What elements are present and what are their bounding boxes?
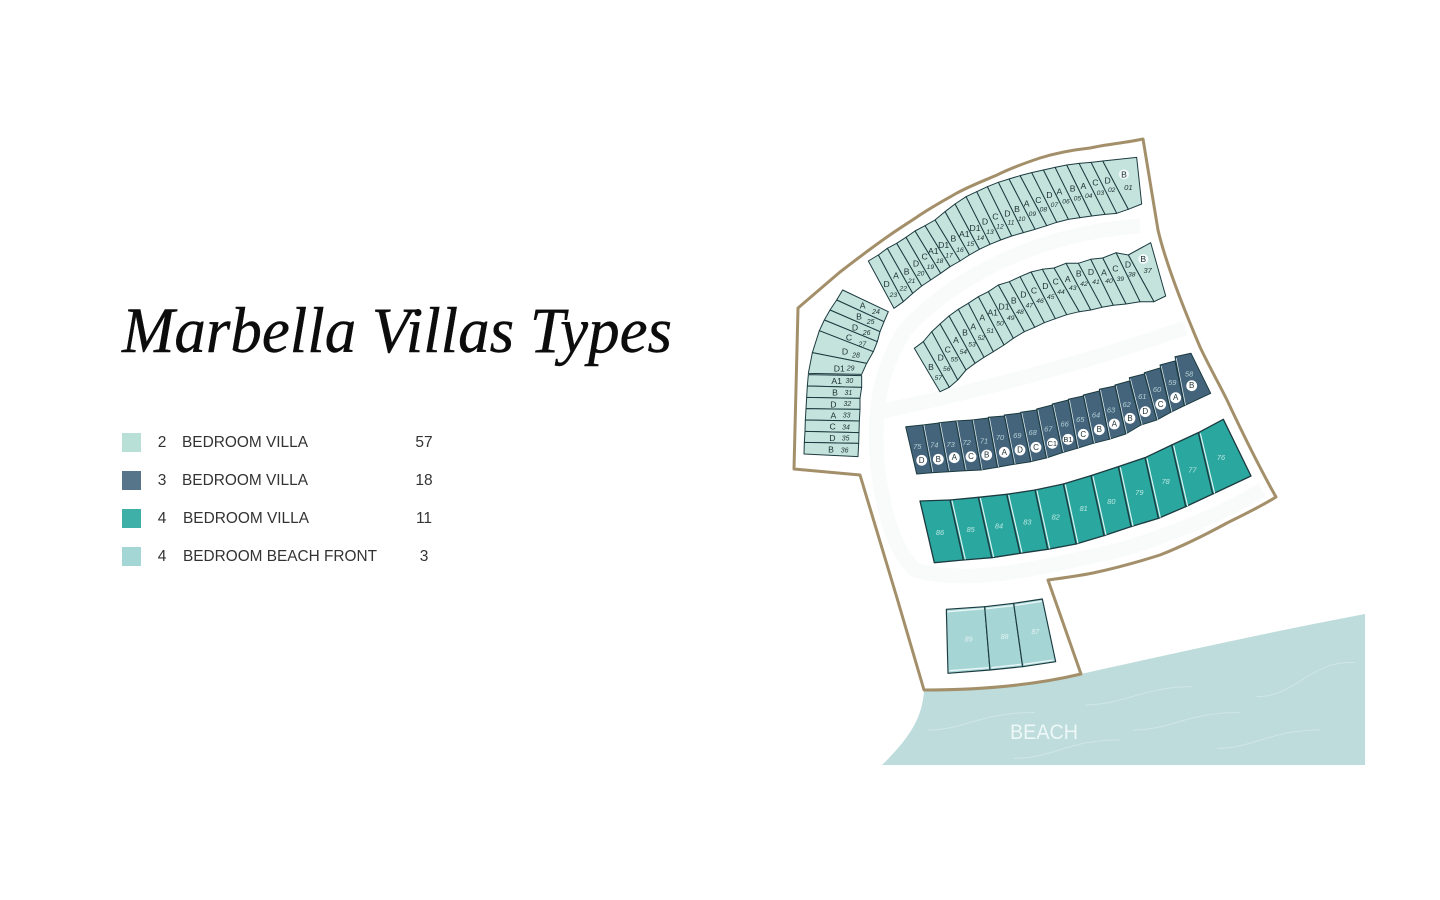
labels: villas 37-57: 37 — [1144, 266, 1153, 275]
labels: villas 24-36: A1 — [831, 376, 842, 386]
labels: villas 58-75: 66 — [1061, 420, 1070, 428]
labels: villas 37-57: 47 — [1026, 302, 1033, 310]
labels: villas 58-75: B — [1127, 414, 1133, 423]
labels: villas 37-57: 55 — [951, 356, 958, 364]
labels: villas 01-23: 15 — [967, 241, 974, 248]
labels: villas 37-57: A — [953, 335, 959, 345]
labels: villas 24-36: C — [830, 422, 836, 432]
labels: villas 58-75: B — [984, 450, 989, 460]
labels: villas 01-23: 09 — [1029, 211, 1036, 218]
labels: villas 01-23: A1 — [959, 229, 970, 239]
labels: villas 01-23: D — [913, 258, 919, 268]
labels: villas 37-57: 45 — [1047, 294, 1055, 301]
labels: villas 24-36: 28 — [851, 352, 860, 359]
labels: villas 76-86: 81 — [1080, 504, 1088, 513]
band: villas 87-89 beach front — [946, 599, 1056, 673]
labels: villas 58-75: B — [936, 455, 941, 464]
labels: villas 01-23: 19 — [927, 264, 934, 271]
site boundary — [794, 139, 1276, 690]
labels: villas 37-57: D1 — [998, 302, 1010, 312]
labels: villas 24-36: 25 — [866, 319, 875, 326]
labels: villas 24-36: A — [830, 410, 836, 420]
labels: villas 58-75: 63 — [1107, 406, 1116, 414]
labels: villas 24-36: A — [860, 301, 866, 311]
labels: villas 37-57: 43 — [1069, 285, 1077, 292]
legend row: 4 bedroom beach front — [122, 547, 428, 566]
labels: villas 24-36: 34 — [842, 424, 850, 431]
labels: villas 58-75: 58 — [1185, 370, 1194, 378]
labels: villas 24-36: 36 — [841, 447, 849, 454]
labels: villas 58-75: 69 — [1013, 431, 1022, 440]
labels: villas 37-57: 41 — [1092, 279, 1100, 286]
beach waves — [928, 663, 1355, 758]
labels: villas 24-36: 31 — [844, 390, 852, 397]
band: villas 58-75 — [906, 353, 1211, 474]
labels: villas 58-75: A — [1112, 420, 1118, 428]
labels: villas 01-23: B — [950, 233, 956, 243]
labels: villas 01-23: D — [982, 217, 988, 227]
labels: villas 76-86 — [936, 453, 1226, 537]
title: Marbella Villas Types — [121, 295, 672, 367]
legend row: 4 bedroom villa — [122, 509, 432, 528]
labels: villas 01-23: 03 — [1097, 190, 1104, 197]
labels: villas 01-23: A — [893, 271, 899, 281]
labels: villas 58-75: 62 — [1123, 400, 1132, 409]
labels: villas 58-75: C1 — [1048, 439, 1057, 448]
labels: villas 01-23: C — [922, 252, 928, 262]
labels: villas 58-75: 73 — [947, 440, 956, 449]
labels: villas 37-57: 53 — [968, 342, 976, 348]
legend row: 3 bedroom villa — [122, 471, 433, 490]
labels: villas 37-57: D — [1020, 290, 1026, 300]
labels: villas 37-57: 56 — [943, 366, 951, 373]
legend row: 3 bedroom villa: 18 — [415, 472, 433, 489]
beach label: BEACH — [1010, 721, 1078, 744]
labels: villas 37-57: 39 — [1117, 276, 1124, 283]
legend row: 2 bedroom villa — [122, 433, 433, 452]
labels: villas 01-23: 06 — [1062, 198, 1070, 205]
labels: villas 37-57: D — [1125, 260, 1131, 270]
labels: villas 58-75: A — [1002, 448, 1008, 457]
labels: villas 01-23: D — [884, 279, 890, 289]
labels: villas 37-57: 52 — [978, 335, 985, 342]
labels: villas 01-23: 11 — [1008, 219, 1015, 226]
labels: villas 76-86: 80 — [1107, 497, 1116, 506]
legend row: 4 bedroom beach front: BEDROOM BEACH FRONT — [183, 548, 378, 565]
labels: villas 37-57: A — [1065, 274, 1071, 284]
legend row: 2 bedroom villa: BEDROOM VILLA — [182, 434, 309, 451]
labels: villas 01-23: 10 — [1018, 216, 1026, 223]
labels: villas 76-86: 79 — [1135, 488, 1143, 497]
labels: villas 24-36: 24 — [871, 309, 880, 316]
labels: villas 24-36: D — [842, 347, 848, 357]
labels: villas 01-23: D1 — [969, 223, 981, 233]
labels: villas 58-75: D — [919, 456, 925, 465]
beach — [882, 614, 1365, 765]
labels: villas 37-57: 48 — [1016, 309, 1024, 316]
labels: villas 01-23: 13 — [986, 229, 994, 236]
labels: villas 01-23: 04 — [1085, 193, 1093, 200]
labels: villas 37-57: 54 — [960, 349, 967, 356]
labels: villas 37-57: B — [1076, 269, 1082, 279]
legend row: 4 bedroom villa: 11 — [416, 510, 432, 527]
labels: villas 01-23: 18 — [936, 258, 944, 265]
labels: villas 58-75: C — [1033, 443, 1039, 452]
labels: villas 01-23: 16 — [956, 247, 964, 254]
labels: villas 01-23: 17 — [945, 252, 953, 259]
labels: villas 01-23: D1 — [938, 240, 949, 250]
labels: villas 37-57: 57 — [935, 375, 942, 382]
labels: villas 01-23: 05 — [1074, 195, 1081, 202]
labels: villas 37-57: C — [1053, 277, 1059, 287]
labels: villas 37-57: A — [970, 322, 976, 332]
labels: villas 01-23: A — [1024, 198, 1030, 208]
band: villas 76-86 — [920, 419, 1251, 563]
labels: villas 58-75 — [913, 370, 1197, 466]
labels: villas 76-86: 86 — [936, 528, 945, 537]
labels: villas 01-23: A1 — [928, 246, 939, 256]
labels: villas 58-75: 70 — [996, 433, 1005, 442]
unit separators: villas 58-75 — [924, 358, 1186, 472]
inner white edge: villas 87-89 — [948, 601, 1053, 671]
labels: villas 24-36: 32 — [843, 401, 851, 408]
labels: villas 87-89: 89 — [965, 636, 973, 643]
labels: villas 24-36: D1 — [834, 363, 845, 373]
labels: villas 37-57: A — [1101, 267, 1107, 277]
labels: villas 87-89 — [965, 629, 1040, 643]
legend row: 4 bedroom beach front: 4 — [158, 548, 167, 565]
labels: villas 01-23: B — [1070, 184, 1076, 194]
legend row: 2 bedroom villa: 57 — [415, 434, 433, 451]
labels: villas 01-23: 12 — [996, 223, 1004, 230]
labels: villas 76-86: 78 — [1162, 477, 1171, 486]
unit separators: villas 76-86 — [952, 433, 1215, 559]
labels: villas 58-75: C — [1080, 430, 1086, 439]
labels: villas 01-23: 23 — [889, 292, 897, 299]
labels: villas 01-23: 07 — [1051, 202, 1058, 209]
labels: villas 01-23: C — [992, 212, 998, 222]
labels: villas 01-23: 01 — [1124, 183, 1133, 192]
labels: villas 58-75: B — [1097, 425, 1102, 434]
labels: villas 76-86: 84 — [995, 521, 1003, 530]
labels: villas 87-89: 88 — [1001, 634, 1009, 641]
band: villas 37-57 — [914, 243, 1166, 392]
labels: villas 01-23: B — [1014, 204, 1020, 214]
labels: villas 37-57: D — [1042, 281, 1048, 291]
labels: villas 58-75: 71 — [980, 436, 988, 446]
labels: villas 01-23: D — [1004, 208, 1010, 218]
labels: villas 37-57: C — [1112, 264, 1118, 274]
labels: villas 24-36: 30 — [845, 378, 853, 385]
labels: villas 58-75: C — [1158, 400, 1164, 409]
labels: villas 01-23: D — [1105, 176, 1111, 186]
labels: villas 37-57: B — [1011, 295, 1017, 305]
labels: villas 37-57: C — [1031, 285, 1037, 295]
labels: villas 24-36: D — [852, 323, 858, 333]
labels: villas 01-23: 02 — [1108, 187, 1116, 194]
labels: villas 76-86: 83 — [1023, 517, 1032, 526]
labels: villas 76-86: 77 — [1188, 465, 1197, 474]
labels: villas 37-57: D — [938, 353, 944, 363]
labels: villas 01-23: A — [1080, 181, 1086, 191]
legend row: 3 bedroom villa: 3 — [158, 472, 166, 489]
labels: villas 58-75: B1 — [1063, 435, 1073, 444]
labels: villas 01-23: 08 — [1040, 206, 1047, 213]
labels: villas 37-57: A1 — [987, 307, 998, 317]
labels: villas 01-23 — [884, 169, 1133, 299]
band: villas 01-23 — [868, 157, 1142, 308]
labels: villas 76-86: 82 — [1052, 512, 1060, 521]
labels: villas 24-36: 26 — [862, 330, 871, 337]
legend row: 2 bedroom villa: 2 — [158, 434, 166, 451]
site roads — [876, 226, 1262, 576]
labels: villas 58-75: A — [1173, 393, 1179, 402]
labels: villas 37-57: B — [962, 328, 968, 338]
labels: villas 58-75: 75 — [913, 442, 922, 451]
labels: villas 24-36: B — [828, 444, 834, 454]
labels: villas 24-36: B — [856, 312, 862, 322]
labels: villas 58-75: 68 — [1029, 428, 1038, 437]
labels: villas 37-57: 49 — [1007, 315, 1015, 322]
labels: villas 37-57: B — [1140, 254, 1146, 264]
labels: villas 58-75: 72 — [963, 438, 972, 447]
labels: villas 24-36: 33 — [843, 412, 851, 419]
labels: villas 37-57: 40 — [1105, 278, 1113, 285]
labels: villas 76-86: 85 — [967, 525, 976, 534]
legend row: 3 bedroom villa: BEDROOM VILLA — [182, 472, 309, 489]
labels: villas 58-75: 74 — [930, 440, 938, 450]
band: villas 24-36 — [804, 290, 888, 457]
labels: villas 01-23: 22 — [899, 285, 907, 292]
labels: villas 24-36: B — [832, 388, 838, 398]
labels: villas 24-36: C — [846, 332, 852, 342]
labels: villas 24-36: 29 — [846, 365, 855, 372]
labels: villas 58-75: B — [1189, 381, 1194, 390]
labels: villas 37-57: 44 — [1057, 289, 1065, 296]
labels: villas 24-36: D — [829, 433, 835, 443]
labels: villas 24-36: D — [830, 399, 836, 409]
labels: villas 58-75: 59 — [1168, 378, 1177, 387]
labels: villas 37-57: 50 — [996, 320, 1004, 328]
labels: villas 58-75: 65 — [1076, 415, 1085, 424]
labels: villas 37-57: 38 — [1128, 272, 1136, 278]
labels: villas 58-75: 64 — [1092, 410, 1100, 420]
labels: villas 58-75: D — [1017, 446, 1023, 454]
labels: villas 76-86: 76 — [1217, 453, 1226, 462]
labels: villas 37-57: B — [928, 362, 934, 372]
labels: villas 58-75: D — [1142, 407, 1148, 416]
labels: villas 37-57: A — [979, 312, 985, 322]
labels: villas 01-23: 20 — [916, 270, 925, 277]
labels: villas 37-57: 46 — [1036, 298, 1044, 305]
labels: villas 01-23: 21 — [907, 278, 916, 285]
labels: villas 37-57: 51 — [987, 328, 994, 335]
legend — [122, 433, 433, 566]
labels: villas 01-23: D — [1046, 190, 1052, 200]
labels: villas 37-57: D — [1088, 267, 1094, 277]
labels: villas 01-23: C — [1035, 195, 1041, 205]
labels: villas 37-57: C — [945, 344, 951, 354]
legend row: 4 bedroom villa: BEDROOM VILLA — [183, 510, 310, 527]
labels: villas 01-23: B — [1121, 169, 1127, 179]
labels: villas 24-36 — [828, 301, 880, 454]
labels: villas 87-89: 87 — [1031, 629, 1040, 636]
labels: villas 58-75: 67 — [1044, 424, 1053, 434]
labels: villas 58-75: 61 — [1138, 392, 1146, 401]
labels: villas 01-23: C — [1092, 178, 1098, 188]
legend row: 4 bedroom beach front: 3 — [420, 548, 428, 565]
labels: villas 01-23: A — [1056, 186, 1062, 196]
labels: villas 58-75: C — [968, 452, 974, 461]
legend row: 4 bedroom villa: 4 — [158, 510, 167, 527]
labels: villas 37-57: 42 — [1080, 281, 1088, 288]
labels: villas 01-23: B — [904, 266, 910, 276]
labels: villas 58-75: A — [952, 453, 958, 462]
labels: villas 58-75: 60 — [1153, 385, 1162, 394]
labels: villas 24-36: 35 — [842, 435, 850, 442]
labels: villas 01-23: 14 — [977, 235, 984, 242]
labels: villas 37-57 — [928, 254, 1153, 382]
labels: villas 24-36: 27 — [857, 341, 867, 348]
